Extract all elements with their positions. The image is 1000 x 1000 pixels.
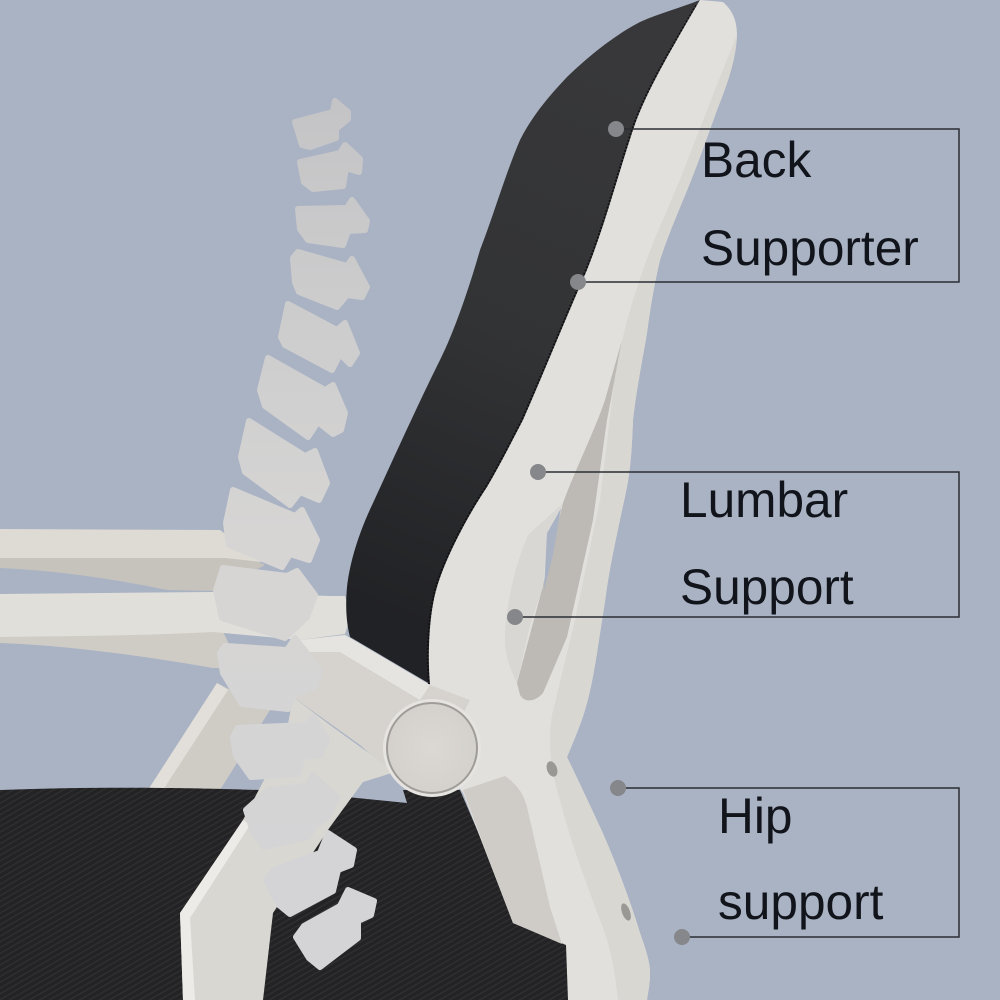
vertebra 10 xyxy=(220,638,320,709)
vertebra 13 xyxy=(266,833,354,914)
marker dots xyxy=(610,780,626,796)
front chair leg xyxy=(180,697,395,1000)
vertebra 9 xyxy=(216,568,315,638)
lower arm bar xyxy=(0,592,351,640)
vertebra 5 xyxy=(281,304,357,370)
vertebra 8 xyxy=(226,490,317,567)
upper arm bar underside xyxy=(0,545,265,591)
rear leg inner panel xyxy=(463,776,562,944)
vertebra 2 xyxy=(300,145,360,189)
lower arm bar underside xyxy=(0,625,240,668)
vertebra 3 xyxy=(298,200,367,245)
upper arm bar xyxy=(0,529,262,562)
frame outer shaded strip xyxy=(550,35,737,1000)
backrest stitching xyxy=(429,6,697,684)
left armrest xyxy=(0,529,351,668)
frame inner recess xyxy=(517,340,622,700)
marker dots xyxy=(530,464,546,480)
front leg highlight xyxy=(180,820,250,1000)
frame inner light section xyxy=(505,503,563,683)
frame opening xyxy=(544,508,561,590)
vertebra 12 xyxy=(246,775,337,847)
vertebra 11 xyxy=(233,716,327,777)
callout: lumbar support: Support xyxy=(680,559,854,615)
marker dots xyxy=(608,121,624,137)
seat cushion xyxy=(0,788,570,1000)
spine illustration xyxy=(216,101,374,967)
callout: hip support: support xyxy=(718,874,884,930)
callout: back supporter: Supporter xyxy=(701,220,919,276)
vertebra 6 xyxy=(260,358,345,437)
rear chair leg xyxy=(148,683,270,790)
leader lines xyxy=(515,472,959,617)
chair white frame xyxy=(429,0,737,1000)
callout: hip support xyxy=(610,780,959,945)
callout: back supporter xyxy=(570,121,959,290)
backrest black cushion xyxy=(346,0,700,684)
vertebra 1 xyxy=(295,101,348,147)
frame screw holes xyxy=(545,760,633,922)
label: Lumbar xyxy=(680,472,848,528)
label: Back xyxy=(701,132,811,188)
leader lines xyxy=(578,129,959,282)
vertebra 7 xyxy=(241,421,327,505)
pivot arm tube xyxy=(293,635,470,772)
callout: lumbar support xyxy=(507,464,959,625)
pivot knob xyxy=(383,699,481,797)
leader lines xyxy=(618,788,959,937)
label: Hip xyxy=(718,788,792,844)
vertebra 14 xyxy=(296,890,374,967)
vertebra 4 xyxy=(293,252,367,307)
